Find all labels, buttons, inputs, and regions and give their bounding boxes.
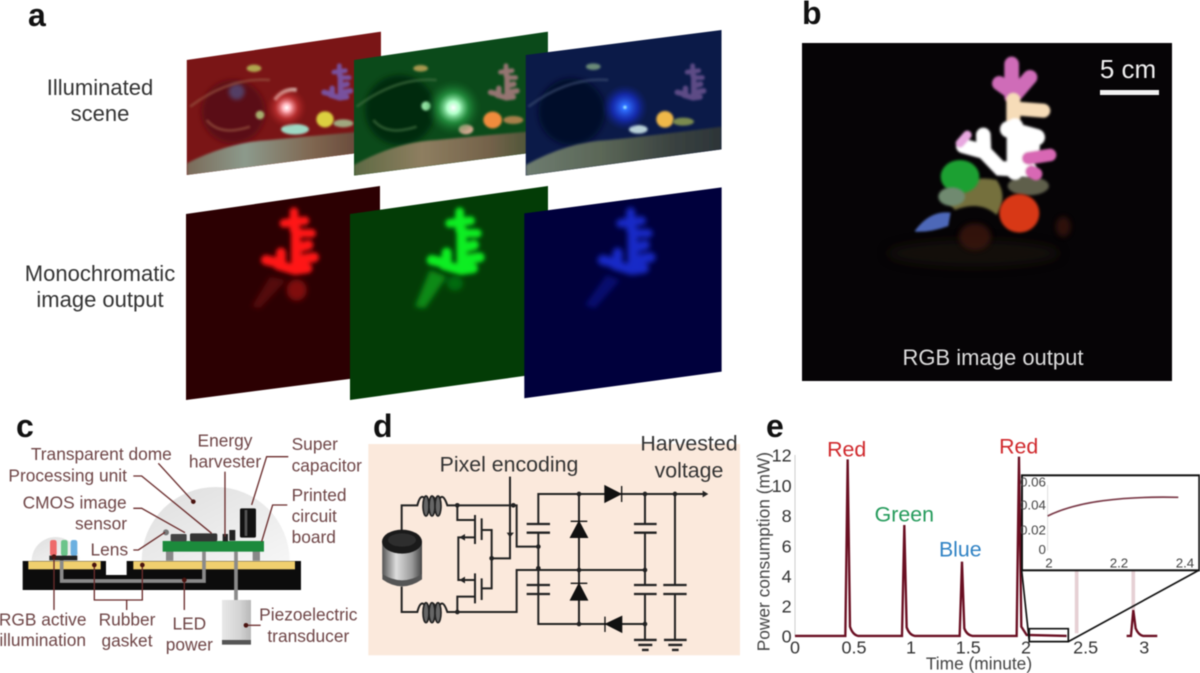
labels: board [292, 527, 336, 547]
panel c: device cross-section [0, 431, 362, 655]
circuit wires [402, 477, 703, 640]
axis titles: Time (minute) [926, 653, 1032, 673]
piezo cylinder [382, 530, 422, 586]
output: red channel [186, 186, 380, 400]
inductor coils [423, 496, 441, 623]
labels: harvester [189, 451, 261, 471]
y tick labels: 2 [782, 597, 792, 617]
leader lines [54, 457, 288, 625]
labels: capacitor [292, 455, 362, 475]
labels: CMOS image [23, 492, 127, 512]
peach background [368, 444, 740, 655]
y tick labels: 0 [782, 627, 792, 647]
x tick labels: 0 [790, 637, 800, 657]
caption: RGB image output [903, 345, 1083, 370]
small dome [32, 537, 80, 561]
series labels [827, 434, 1038, 562]
inset plot: 0.04 [1020, 498, 1047, 513]
labels: RGB active [0, 610, 86, 630]
circuit board [163, 508, 264, 561]
panel label d: d [373, 408, 393, 444]
power trace [795, 457, 1157, 636]
labels: gasket [101, 631, 153, 651]
LED power wiring [62, 552, 236, 600]
scene: green illumination [350, 30, 550, 177]
faded peaks [1077, 570, 1133, 633]
leader dots [52, 499, 248, 628]
junction dots [455, 492, 677, 626]
panel b: RGB image output [802, 43, 1172, 381]
inset plot: 2.4 [1176, 555, 1195, 570]
series labels: Red [999, 434, 1038, 458]
x tick labels: 1 [906, 637, 916, 657]
series labels: Blue [939, 538, 982, 562]
scene: blue illumination [523, 28, 723, 178]
zoom box and connectors [1022, 570, 1199, 642]
labels: Energy [198, 431, 253, 451]
scale bar: 5 cm [1100, 54, 1156, 84]
labels: illumination [0, 630, 86, 650]
labels: power [166, 635, 213, 655]
inset plot [1020, 474, 1199, 570]
rubber gasket strips [28, 561, 295, 569]
labels: transducer [267, 626, 349, 646]
panel label c: c [16, 408, 34, 444]
x tick labels: 2.5 [1073, 637, 1098, 657]
panel label e: e [766, 408, 784, 444]
labels: sensor [75, 513, 127, 533]
x tick labels: 2 [1021, 637, 1031, 657]
row label: monochromatic image output: image output [36, 287, 164, 312]
coral composite image [887, 64, 1071, 267]
labels: Pixel encoding [440, 453, 578, 477]
panel a: monochromatic outputs [186, 186, 722, 400]
labels: Rubber [99, 610, 156, 630]
scale bar [1100, 54, 1159, 95]
large dome [142, 487, 290, 561]
panel a: illuminated scenes [183, 28, 723, 178]
x tick labels: 1.5 [956, 637, 981, 657]
x tick labels: 0.5 [841, 637, 866, 657]
labels: circuit [292, 506, 337, 526]
housing base [23, 561, 301, 590]
output: blue channel [524, 187, 722, 398]
series labels: Red [827, 438, 866, 462]
labels: Harvested [640, 432, 738, 456]
y tick labels: 12 [772, 446, 792, 466]
y tick labels: 6 [782, 536, 792, 556]
y tick labels: 4 [782, 567, 792, 587]
row label: monochromatic image output: Monochromatic [25, 261, 175, 286]
inset plot: 0.06 [1020, 474, 1046, 489]
y tick labels: 10 [772, 476, 792, 496]
labels: Printed [292, 485, 347, 505]
series labels: Green [875, 502, 934, 526]
scene: red illumination [183, 30, 383, 177]
row label: illuminated scene: scene [71, 101, 129, 126]
RGB LEDs [49, 540, 77, 560]
labels: voltage [655, 458, 723, 482]
inset plot: 2 [1045, 555, 1053, 570]
labels: Transparent dome [31, 444, 172, 464]
diodes [571, 486, 622, 632]
grounds [634, 640, 687, 650]
panel d: circuit [368, 432, 740, 655]
inset plot: 0 [1039, 542, 1046, 557]
inset plot: 2.2 [1110, 555, 1128, 570]
labels: Lens [91, 540, 128, 560]
labels [440, 432, 738, 482]
labels: Piezoelectric [259, 605, 358, 625]
y tick labels: 8 [782, 506, 792, 526]
row label: illuminated scene: Illuminated [47, 75, 153, 100]
labels: Processing unit [8, 465, 127, 485]
y tick labels [772, 446, 792, 647]
capacitors [527, 524, 687, 594]
x tick labels [790, 637, 1149, 657]
inset plot: 0.02 [1020, 523, 1046, 538]
panel e: power chart: Power consumption (mW) [753, 452, 773, 651]
arrowheads [459, 491, 708, 583]
axes [793, 455, 796, 636]
x tick labels: 3 [1139, 637, 1149, 657]
labels: Super [292, 434, 338, 454]
piezoelectric transducer [222, 600, 251, 645]
panel e: power chart [753, 434, 1199, 673]
labels [0, 431, 362, 655]
output: green channel [350, 186, 548, 400]
labels: LED [172, 613, 206, 633]
